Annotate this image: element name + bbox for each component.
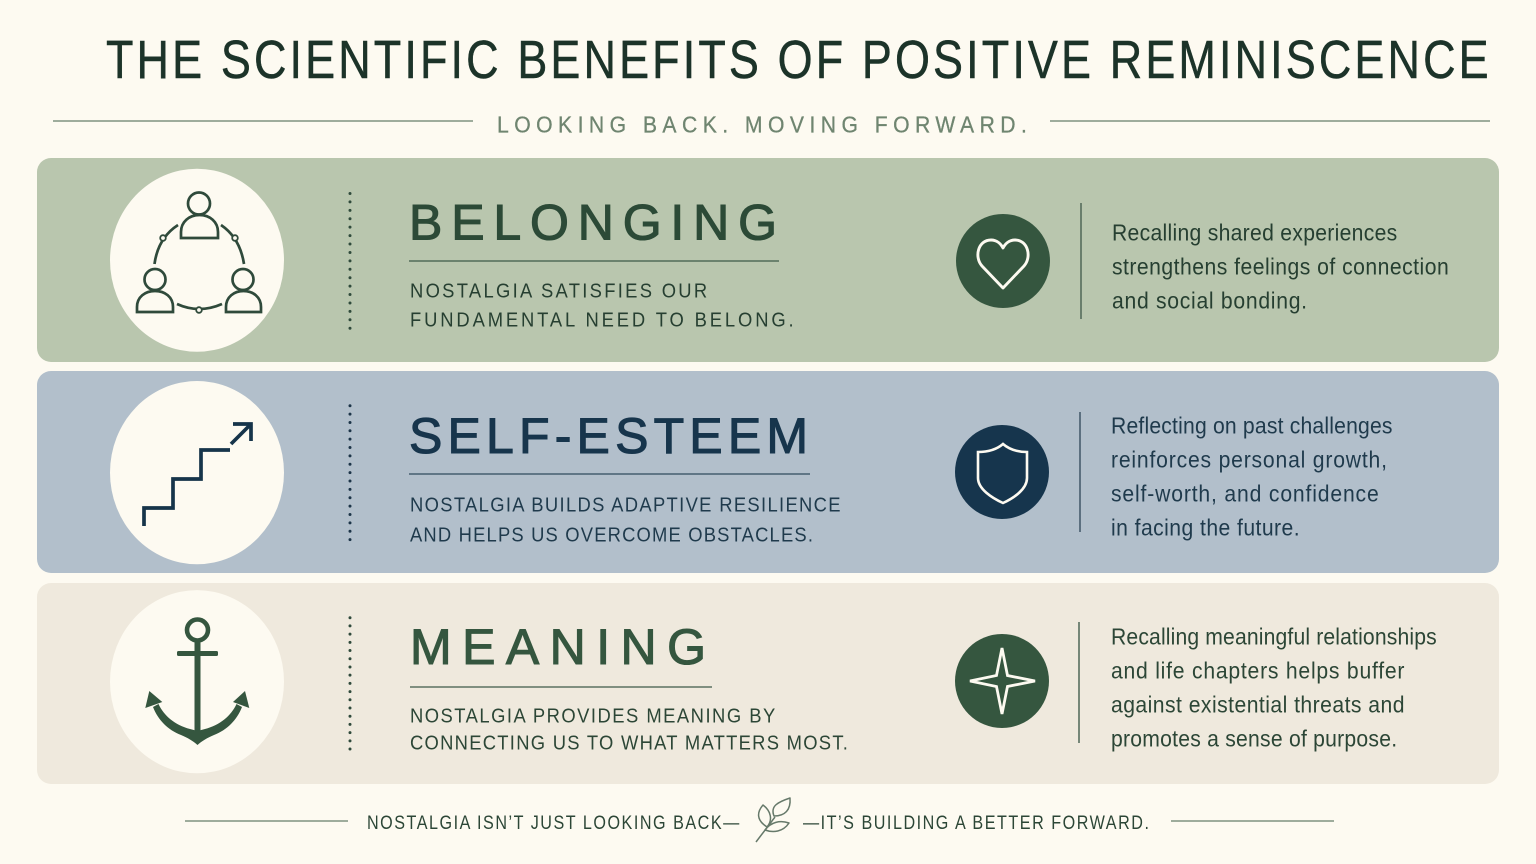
description: belonging: strengthens feelings of connection xyxy=(1112,254,1449,280)
icon: stairs with arrow xyxy=(110,381,284,564)
description: meaning: Recalling meaningful relationships xyxy=(1111,624,1437,650)
heading: meaning: MEANING xyxy=(410,619,706,675)
icon: leaf sprig xyxy=(756,798,790,842)
tagline: self-esteem: AND HELPS US OVERCOME OBSTACLES. xyxy=(410,525,813,547)
tagline: belonging: FUNDAMENTAL NEED TO BELONG. xyxy=(410,310,794,332)
dotted divider xyxy=(348,194,352,329)
panel: meaning xyxy=(37,583,1499,784)
description: belonging: and social bonding. xyxy=(1112,288,1307,314)
tagline: self-esteem: NOSTALGIA BUILDS ADAPTIVE RESILIENCE xyxy=(410,495,841,517)
description: self-esteem: reinforces personal growth, xyxy=(1111,447,1387,473)
heading: self-esteem: SELF-ESTEEM xyxy=(409,408,808,464)
dotted divider xyxy=(348,618,352,750)
icon: anchor xyxy=(110,590,284,773)
icon: shield xyxy=(955,425,1049,519)
title: THE SCIENTIFIC BENEFITS OF POSITIVE REMINISCENCE xyxy=(106,30,1489,90)
description: self-esteem xyxy=(1111,413,1393,541)
footer message: —IT’S BUILDING A BETTER FORWARD. xyxy=(803,812,1149,833)
footer message: NOSTALGIA ISN’T JUST LOOKING BACK— xyxy=(367,812,740,833)
description: self-esteem: self-worth, and confidence xyxy=(1111,481,1379,507)
tagline: meaning: CONNECTING US TO WHAT MATTERS MOST. xyxy=(410,733,848,755)
description: meaning: against existential threats and xyxy=(1111,692,1404,718)
tagline: belonging: NOSTALGIA SATISFIES OUR xyxy=(410,281,707,303)
description: meaning xyxy=(1111,624,1437,752)
description: meaning: and life chapters helps buffer xyxy=(1111,658,1404,684)
description: self-esteem: in facing the future. xyxy=(1111,515,1300,541)
tagline: self-esteem xyxy=(410,495,841,547)
description: meaning: promotes a sense of purpose. xyxy=(1111,726,1397,752)
footer message xyxy=(185,798,1334,842)
description: belonging: Recalling shared experiences xyxy=(1112,220,1397,246)
icon: four-point star xyxy=(955,634,1049,728)
tagline: meaning xyxy=(410,706,848,755)
panel: belonging xyxy=(37,158,1499,362)
panel: self-esteem xyxy=(37,371,1499,573)
dotted divider xyxy=(348,406,352,541)
description: belonging xyxy=(1112,220,1449,314)
tagline: meaning: NOSTALGIA PROVIDES MEANING BY xyxy=(410,706,775,728)
subtitle: LOOKING BACK. MOVING FORWARD. xyxy=(497,112,1027,138)
icon: people circle xyxy=(110,169,284,352)
heading: belonging: BELONGING xyxy=(409,194,777,250)
description: self-esteem: Reflecting on past challenges xyxy=(1111,413,1393,439)
icon: heart xyxy=(956,214,1050,308)
tagline: belonging xyxy=(410,281,794,332)
